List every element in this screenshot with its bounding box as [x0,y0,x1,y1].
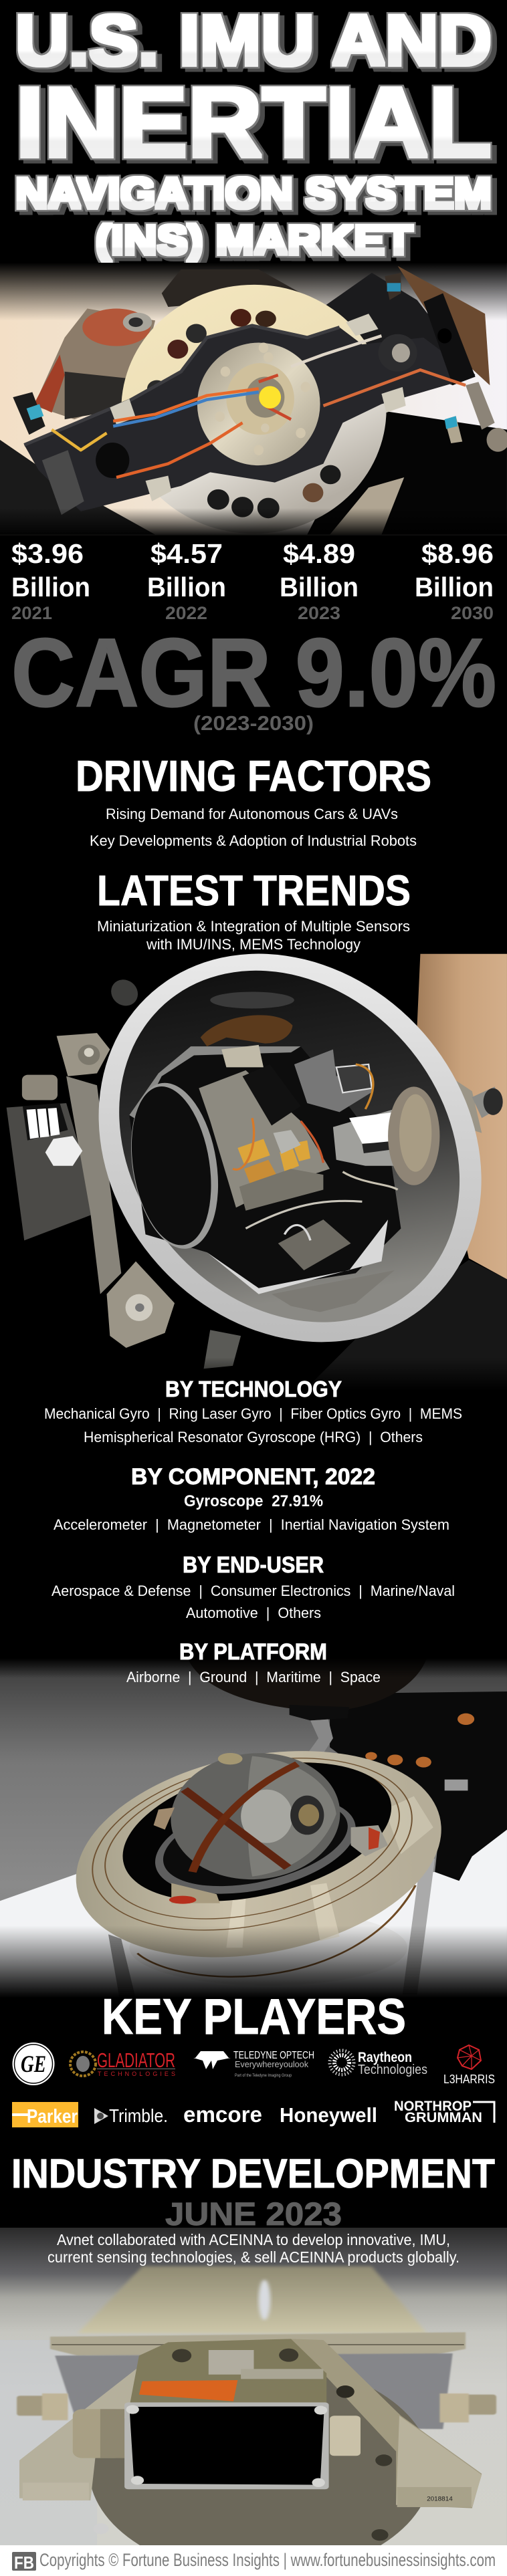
image: gyro hero photo [0,263,507,538]
title: NAVIGATION SYSTEM [15,169,492,217]
image: INS gimbal in housing [7,953,507,1379]
driving factors text: Rising Demand for Autonomous Cars & UAVs [106,806,398,822]
logo: Emcore: emcore [183,2102,262,2127]
market size: 2021 [11,538,90,623]
logo: Northrop Grumman [394,2099,494,2125]
segment: by technology: Mechanical Gyro | Ring Laser Gyro | Fiber Optics Gyro | MEMS [44,1405,462,1422]
logo: Teledyne Optech: TELEDYNE OPTECH [233,2050,314,2061]
latest trends text: Miniaturization & Integration of Multiple Sensors [97,918,410,935]
logo: L3Harris: L3HARRIS [443,2073,495,2086]
date: June 2023: JUNE 2023 [165,2197,342,2232]
logo: Raytheon Technologies [330,2050,427,2077]
segment: by component: Gyroscope 27.91% [184,1492,323,1510]
market size: 2023 [280,538,359,623]
heading: latest trends: LATEST TRENDS [97,866,411,915]
segment: by platform: Airborne | Ground | Maritime | Space [126,1669,381,1685]
logo: Gladiator Technologies: TECHNOLOGIES [98,2071,175,2077]
image: INS housing front view [0,2228,507,2576]
logo: Gladiator Technologies: GLADIATOR [97,2048,175,2072]
image: INS housing front view: 2018814 [427,2496,453,2502]
market size: 2022: 2022 [165,603,207,623]
logo: Teledyne Optech [193,2050,314,2078]
logo: Teledyne Optech: Part of the Teledyne Imaging Group [235,2074,292,2078]
segment: by platform: BY PLATFORM [179,1639,327,1665]
logo: GE [12,2042,55,2085]
CAGR figure: (2023-2030) [193,711,314,735]
logo: Northrop Grumman: GRUMMAN [405,2110,482,2125]
logo: Gladiator Technologies [70,2048,175,2077]
market size: 2021: 2021 [11,603,52,623]
segment: by end-user: Automotive | Others [186,1605,321,1621]
logo: Parker: Parker [27,2106,78,2127]
market size: 2030: Billion [415,572,494,602]
segment: by component [54,1464,449,1533]
logo: Honeywell: Honeywell [280,2103,377,2127]
market size: 2022: Billion [147,572,226,602]
logo: L3Harris [443,2045,495,2086]
segment: by end-user [52,1552,455,1621]
segment: by platform [126,1639,381,1685]
segment: by end-user: BY END-USER [183,1552,324,1578]
heading: driving factors: DRIVING FACTORS [76,751,431,800]
market size: 2023: Billion [280,572,359,602]
latest trends text [97,918,410,953]
market size: 2030: 2030 [451,603,494,623]
title: INERTIAL [15,68,492,178]
industry development text: current sensing technologies, & sell ACEINNA products globally. [47,2248,460,2266]
industry development text: Avnet collaborated with ACEINNA to develop innovative, IMU, [57,2231,450,2248]
segment: by technology: Hemispherical Resonator Gyroscope (HRG) | Others [84,1429,423,1445]
footer: FB [14,2553,34,2573]
industry development text [47,2231,460,2266]
segment: by component: Accelerometer | Magnetometer | Inertial Navigation System [54,1516,449,1533]
driving factors text [90,806,417,849]
market size: 2023: 2023 [298,603,340,623]
market size: 2022: $4.57 [150,538,223,569]
logo: Parker [12,2102,78,2127]
title: U.S. IMU AND [15,0,492,80]
segment: by end-user: Aerospace & Defense | Consumer Electronics | Marine/Naval [52,1583,455,1599]
logo: Raytheon Technologies: Raytheon [358,2050,412,2065]
market size: 2022 [147,538,226,623]
market size: 2030 [415,538,494,623]
footer [0,2545,507,2576]
segment: by component: BY COMPONENT, 2022 [131,1464,375,1490]
title [15,0,492,263]
market size: 2021: Billion [11,572,90,602]
driving factors text: Key Developments & Adoption of Industrial Robots [90,832,417,849]
title: (INS) MARKET [96,217,413,263]
market size: 2021: $3.96 [11,538,84,569]
segment: by technology: BY TECHNOLOGY [165,1377,342,1401]
logo: Northrop Grumman: NORTHROP [394,2099,472,2114]
logo: Teledyne Optech: Everywhereyoulook [235,2059,308,2069]
logo: Raytheon Technologies: Technologies [358,2063,427,2077]
image: gimbal sphere on stand [0,1658,507,2019]
market size: 2030: $8.96 [421,538,494,569]
heading: key players: KEY PLAYERS [102,1988,406,2044]
market size: 2023: $4.89 [283,538,355,569]
logo: Trimble: Trimble. [109,2105,168,2126]
logo: GE: GE [21,2051,46,2077]
latest trends text: with IMU/INS, MEMS Technology [146,936,361,953]
segment: by technology [44,1377,462,1445]
